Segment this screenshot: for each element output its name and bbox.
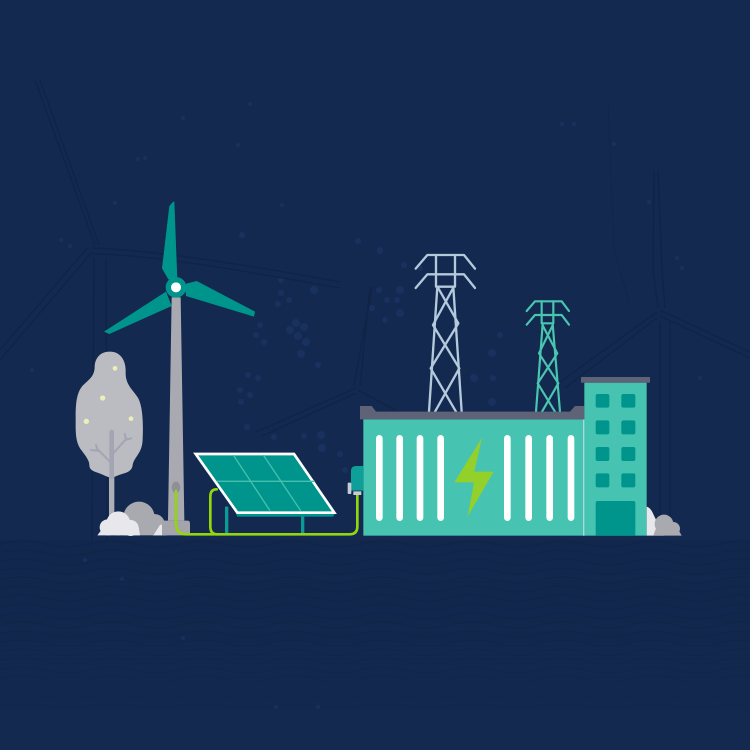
solar panel — [196, 454, 335, 534]
background wind turbine: right — [560, 100, 750, 520]
green power cables — [176, 489, 357, 534]
bushes — [97, 502, 167, 536]
background dots — [30, 102, 702, 709]
bushes right — [647, 507, 682, 536]
wind turbine — [104, 202, 255, 535]
icon: lightning bolt — [454, 438, 494, 517]
small pylon — [527, 301, 569, 412]
office tower — [581, 377, 650, 536]
battery stripes — [376, 435, 574, 521]
cable plug — [348, 466, 363, 495]
large pylon — [416, 255, 475, 412]
left scene group — [76, 202, 357, 536]
right scene group — [348, 255, 682, 536]
background wind turbine: centre — [256, 287, 395, 436]
battery building — [360, 406, 585, 536]
tree — [76, 352, 143, 518]
background wind turbine: left — [0, 80, 340, 540]
water texture — [0, 540, 750, 710]
